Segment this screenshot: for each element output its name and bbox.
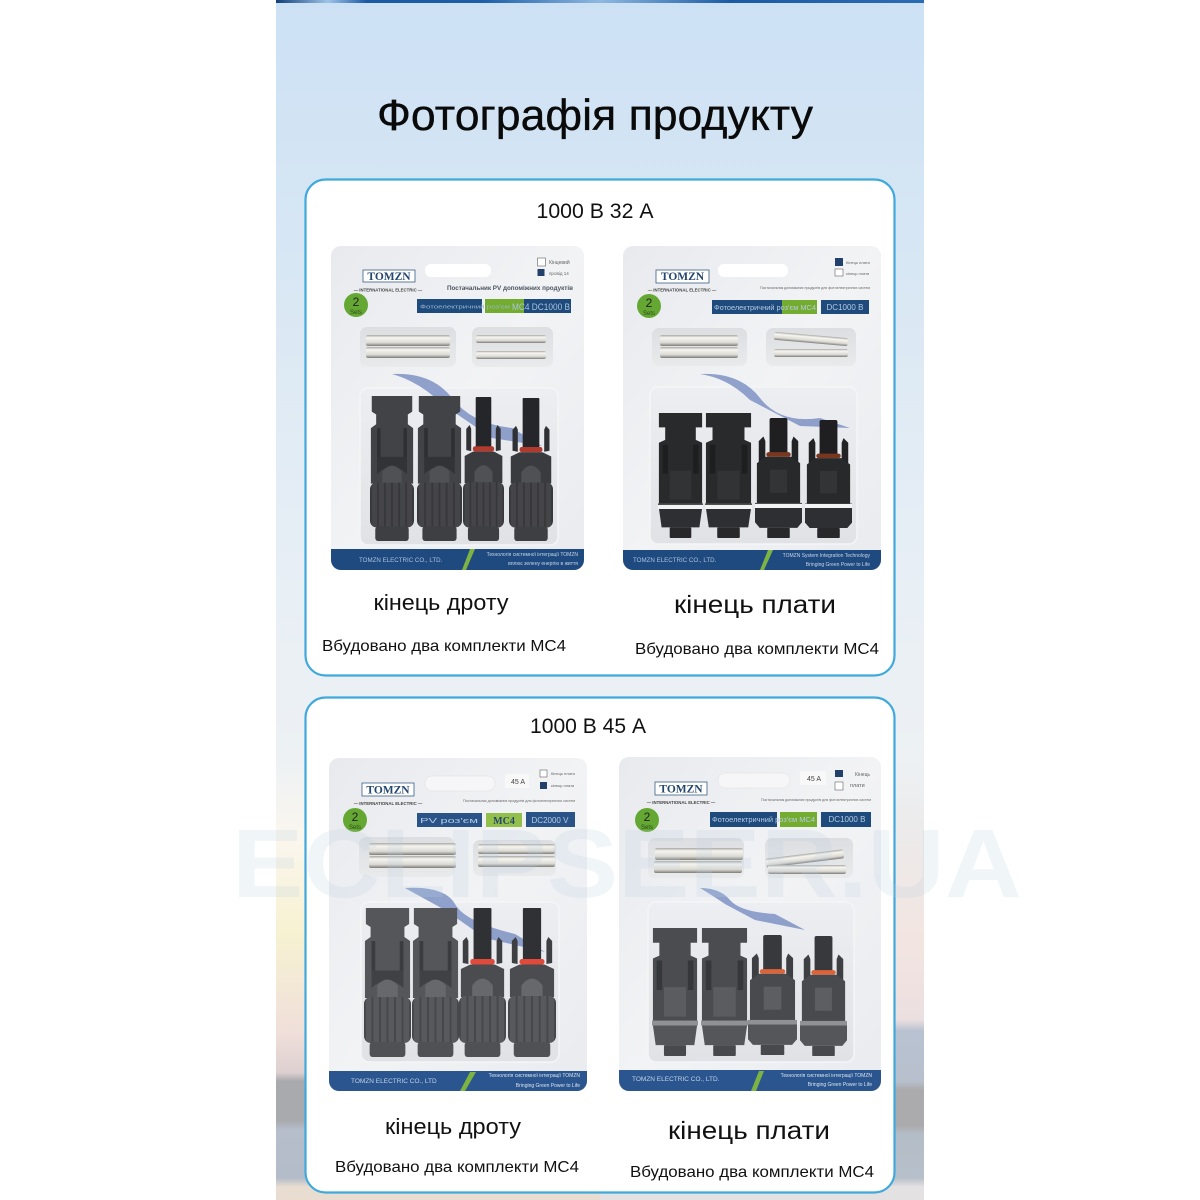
product photo: wire end 32 A: Кінцевий: [549, 259, 570, 266]
product photo: wire end 45 A: [329, 758, 587, 1091]
product photo: board end 45 A: 2: [644, 810, 651, 824]
product photo: wire end 32 A: TOMZN: [367, 271, 411, 283]
connectors: [658, 413, 852, 538]
product photo: board end 32 A: TOMZN: [661, 271, 705, 283]
product photo: wire end 32 A: Постачальник PV допоміжних продуктів: [447, 285, 573, 292]
product photo: board end 32 A: 2: [646, 296, 653, 310]
product photo: board end 32 A: Кінець плати: [846, 260, 870, 265]
product photo: board end 45 A: [619, 757, 881, 1091]
caption: wire end: Вбудовано два комплекти MC4: [335, 1159, 579, 1176]
title: Фотографія продукту: [377, 91, 813, 140]
product photo: board end 32 A: Постачальник допоміжних продуктів для фотоелектричних систем: [760, 285, 870, 290]
heading: 1000 В 32 А: 1000 В 32 А: [536, 200, 654, 223]
label: board end: кінець плати: [668, 1117, 830, 1145]
product photo: wire end 32 A: TOMZN ELECTRIC CO., LTD.: [359, 557, 443, 564]
product photo: board end 32 A: кінець плати: [846, 271, 869, 276]
product photo: wire end 45 A: DC2000 V: [532, 816, 569, 825]
product photo: wire end 45 A: кінець плати: [551, 783, 574, 788]
product photo: board end 45 A: — INTERNATIONAL ELECTRIC —: [647, 800, 716, 805]
product photo: wire end 45 A: Кінець плати: [551, 771, 575, 776]
caption: board end: Вбудовано два комплекти MC4: [635, 641, 879, 658]
product photo: board end 32 A: Sets: [643, 311, 655, 317]
product photo: board end 32 A: Фотоелектричний роз'єм MC4: [714, 304, 816, 312]
product photo: wire end 32 A: Технологія системної інтеграції TOMZN: [487, 552, 578, 558]
product photo: board end 45 A: Технологія системної інтеграції TOMZN: [781, 1073, 872, 1079]
product photo: wire end 45 A: TOMZN: [366, 784, 410, 796]
product photo: wire end 45 A: TOMZN ELECTRIC CO., LTD: [351, 1078, 437, 1085]
metal pins: [366, 335, 546, 359]
product photo: board end 45 A: Кінець: [855, 772, 870, 778]
product photo: board end 32 A: TOMZN ELECTRIC CO., LTD.: [633, 557, 717, 564]
panel: 1000 V 32 A: [306, 180, 894, 676]
heading: 1000 В 45 А: 1000 В 45 А: [530, 715, 646, 738]
product photo: board end 45 A: 45 A: [807, 776, 821, 783]
label: board end: кінець плати: [674, 591, 836, 619]
white connector bands: [658, 504, 852, 509]
watermark: ECLIPSEER.UA: [232, 809, 1022, 918]
sky background panel: [276, 0, 924, 1200]
metal pins: [369, 843, 555, 868]
product photo: board end 32 A: Bringing Green Power to Life: [806, 562, 870, 568]
product photo: wire end 45 A: 45 A: [511, 779, 525, 786]
product photo: board end 32 A: [623, 246, 881, 570]
product photo: board end 45 A: Фотоелектричний роз'єм MC4: [712, 816, 815, 824]
product photo: board end 45 A: TOMZN: [659, 784, 703, 796]
connectors: [364, 908, 556, 1057]
product photo: wire end 45 A: Sets: [349, 825, 361, 831]
product photo: board end 45 A: Постачальник допоміжних продуктів для фотоелектричних систем: [761, 797, 871, 802]
product photo: wire end 45 A: Bringing Green Power to Life: [516, 1083, 580, 1089]
product photo: wire end 32 A: — INTERNATIONAL ELECTRIC —: [354, 288, 423, 292]
connectors: [370, 396, 553, 541]
product photo: wire end 32 A: [331, 246, 584, 570]
product photo: board end 45 A: TOMZN ELECTRIC CO., LTD.: [632, 1076, 720, 1083]
product photo: wire end 32 A: MC4 DC1000 В: [512, 302, 570, 312]
product photo: wire end 32 A: провід 14: [549, 271, 569, 276]
product photo: board end 45 A: DC1000 В: [829, 815, 865, 824]
product photo: wire end 45 A: Технологія системної інтеграції TOMZN: [489, 1073, 580, 1079]
caption: wire end: Вбудовано два комплекти MC4: [322, 638, 566, 655]
label: wire end: кінець дроту: [374, 590, 508, 615]
product photo: board end 32 A: DC1000 В: [827, 303, 863, 312]
metal pins: [654, 848, 846, 874]
product photo: board end 45 A: Sets: [641, 825, 653, 831]
product photo: wire end 32 A: Фотоелектричний роз'єм: [420, 304, 510, 310]
product photo: wire end 45 A: Постачальник допоміжних продуктів для фотоелектричних систем: [463, 798, 575, 803]
connectors: [652, 928, 847, 1056]
metal pins: [660, 332, 848, 358]
product photo: wire end 45 A: PV роз'єм: [420, 818, 478, 825]
product photo: wire end 45 A: MC4: [493, 816, 515, 827]
product photo: wire end 32 A: 2: [353, 295, 360, 309]
product photo: wire end 32 A: Sets: [350, 310, 362, 316]
product photo: wire end 32 A: вплює зелену енергію в життя: [508, 561, 578, 567]
label: wire end: кінець дроту: [385, 1114, 521, 1139]
product photo: board end 32 A: TOMZN System Integration Technology: [783, 553, 870, 559]
product photo: wire end 45 A: — INTERNATIONAL ELECTRIC —: [354, 801, 423, 806]
product photo: board end 32 A: — INTERNATIONAL ELECTRIC —: [648, 288, 717, 292]
panel: 1000 V 45 A: [306, 698, 894, 1192]
product photo: board end 45 A: Bringing Green Power to Life: [808, 1082, 872, 1088]
caption: board end: Вбудовано два комплекти MC4: [630, 1164, 874, 1181]
product photo: wire end 45 A: 2: [352, 810, 359, 824]
product photo: board end 45 A: плати: [850, 783, 865, 789]
